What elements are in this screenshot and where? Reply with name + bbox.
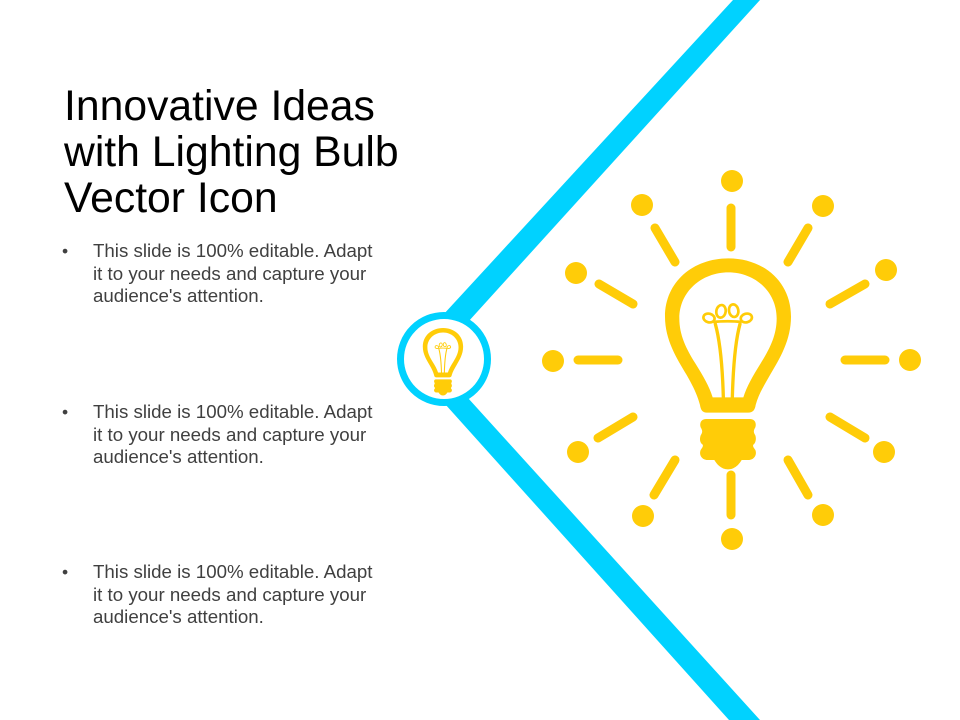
small bulb badge	[400, 316, 488, 402]
text block 3: audience's attention.	[93, 606, 264, 627]
text block 1: audience's attention.	[93, 285, 264, 306]
text block 2: audience's attention.	[93, 446, 264, 467]
text block 2: •	[62, 402, 68, 422]
text block 2: it to your needs and capture your	[93, 424, 366, 445]
text block 3: it to your needs and capture your	[93, 584, 366, 605]
text block 3: This slide is 100% editable. Adapt	[93, 561, 372, 582]
text block 1: This slide is 100% editable. Adapt	[93, 240, 372, 261]
cyan diagonal arm: upper	[443, 0, 760, 322]
title: Innovative Ideas	[64, 82, 375, 130]
text block 2: This slide is 100% editable. Adapt	[93, 401, 372, 422]
title: with Lighting Bulb	[64, 128, 399, 176]
text block 1: •	[62, 241, 68, 261]
text block 2	[62, 401, 372, 467]
text block 1: it to your needs and capture your	[93, 263, 366, 284]
text block 1	[62, 240, 372, 306]
title	[64, 82, 399, 222]
cyan diagonal arm: lower	[445, 398, 760, 720]
text block 3: •	[62, 562, 68, 582]
title: Vector Icon	[64, 174, 278, 222]
icon: large light bulb	[665, 258, 791, 469]
rays around the bulb	[542, 170, 921, 550]
text block 3	[62, 561, 372, 627]
